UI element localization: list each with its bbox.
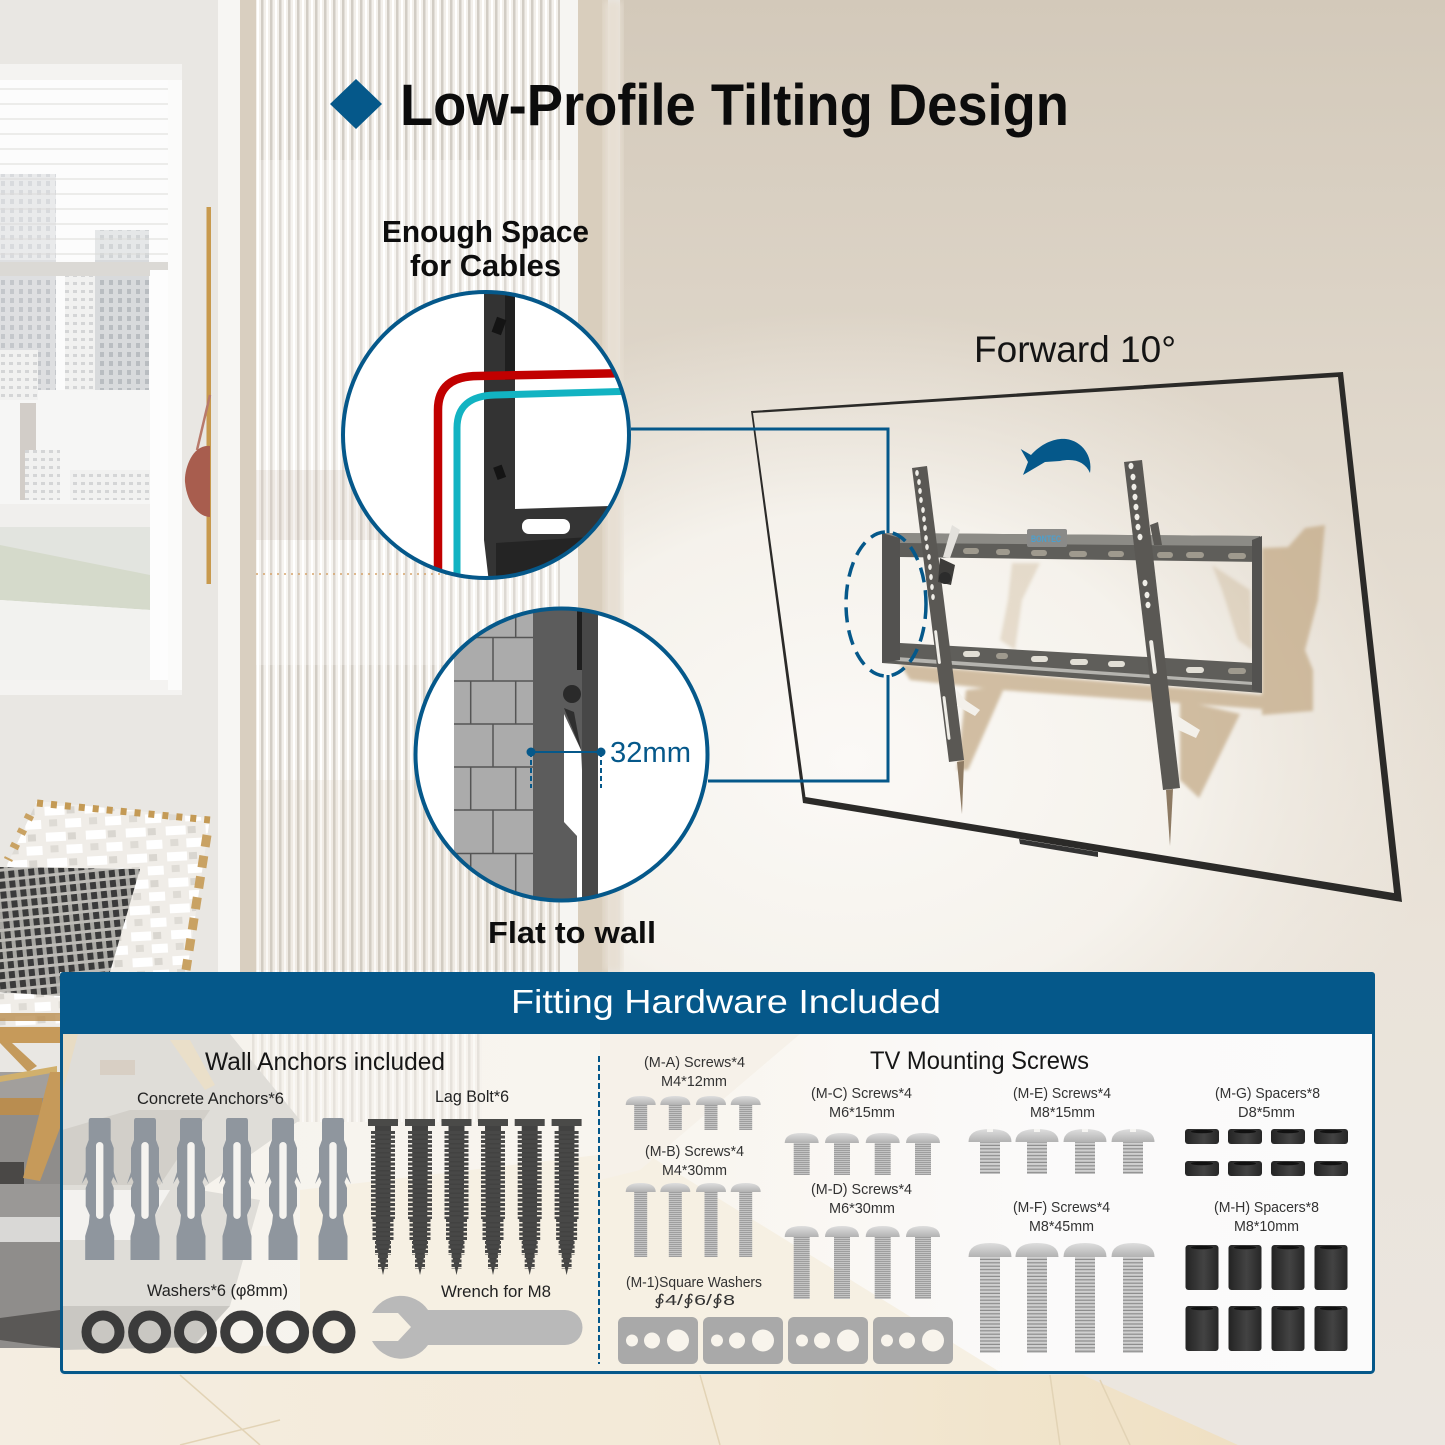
M-H spacers: M8*10mm [1234, 1218, 1299, 1235]
mount profile [484, 294, 608, 576]
M-F screws [968, 1199, 1154, 1353]
logo plate [1027, 529, 1067, 547]
M-C screws: M6*15mm [829, 1104, 895, 1121]
cyan cable [454, 388, 622, 574]
mount side profile [533, 600, 598, 910]
label: forward 10 degrees: Forward 10° [974, 329, 1176, 370]
M-A screws [626, 1054, 761, 1130]
washers: Washers*6 (φ8mm) [147, 1282, 288, 1300]
M-A screws: (M-A) Screws*4 [644, 1054, 745, 1071]
M-F screws: M8*45mm [1029, 1218, 1094, 1235]
panel header band [60, 972, 1375, 1034]
square washers: ∮4/∮6/∮8 [654, 1292, 735, 1309]
M-E screws: M8*15mm [1030, 1104, 1095, 1121]
M-D screws [785, 1181, 940, 1299]
red cable [434, 369, 615, 570]
dimension: 32mm: 32mm [610, 737, 691, 769]
M-G spacers: (M-G) Spacers*8 [1215, 1085, 1320, 1102]
M-G spacers [1185, 1085, 1348, 1176]
M-C screws: (M-C) Screws*4 [811, 1085, 912, 1102]
concrete anchors: Concrete Anchors*6 [137, 1090, 284, 1108]
brick wall [454, 600, 533, 910]
tilting wall bracket [882, 460, 1262, 846]
detail circle: cable space [341, 290, 631, 580]
dimension: 32mm [526, 737, 691, 788]
panel header band: Fitting Hardware Included [511, 983, 941, 1020]
M-D screws: (M-D) Screws*4 [811, 1181, 912, 1198]
dashed highlight ellipse [846, 532, 926, 676]
panel: fitting hardware [60, 972, 1375, 1372]
washers [86, 1282, 350, 1348]
window with city view [0, 64, 182, 695]
connector lines to detail circles [631, 429, 888, 781]
title: Low-Profile Tilting Design [400, 73, 1069, 138]
door frame and fluted glass [218, 0, 622, 972]
wrench [372, 1283, 582, 1359]
heading: enough space for cables: for Cables [410, 248, 561, 283]
icon: diamond bullet [330, 79, 382, 129]
concrete anchors [82, 1090, 351, 1260]
TV outline tilted forward [751, 372, 1402, 902]
square washers: (M-1)Square Washers [626, 1274, 762, 1291]
wrench: Wrench for M8 [441, 1283, 551, 1301]
heading: enough space for cables [382, 214, 589, 283]
M-E screws [968, 1085, 1154, 1174]
woven chair with pillow [0, 801, 210, 996]
bracket shadows on wall [900, 525, 1325, 798]
M-B screws: (M-B) Screws*4 [645, 1143, 744, 1160]
M-H spacers: (M-H) Spacers*8 [1214, 1199, 1319, 1216]
M-C screws [785, 1085, 940, 1175]
heading: wall anchors: Wall Anchors included [205, 1048, 445, 1076]
M-H spacers [1186, 1199, 1348, 1351]
divider [598, 1056, 600, 1364]
M-B screws [626, 1143, 761, 1257]
M-F screws: (M-F) Screws*4 [1013, 1199, 1110, 1216]
heading: TV mounting screws: TV Mounting Screws [870, 1047, 1089, 1075]
heading: enough space for cables: Enough Space [382, 214, 589, 249]
wooden rail with hanging bag [185, 207, 211, 584]
M-D screws: M6*30mm [829, 1200, 895, 1217]
lag bolts [368, 1088, 582, 1275]
M-A screws: M4*12mm [661, 1073, 727, 1090]
detail circle: flat to wall [416, 600, 708, 910]
square washers [618, 1274, 953, 1364]
logo plate: BONTEC [1031, 534, 1061, 544]
M-G spacers: D8*5mm [1238, 1104, 1295, 1121]
M-B screws: M4*30mm [662, 1162, 727, 1179]
lag bolts: Lag Bolt*6 [435, 1088, 509, 1106]
heading: flat to wall: Flat to wall [488, 915, 656, 950]
arrow: tilt direction [1021, 439, 1090, 475]
M-E screws: (M-E) Screws*4 [1013, 1085, 1111, 1102]
